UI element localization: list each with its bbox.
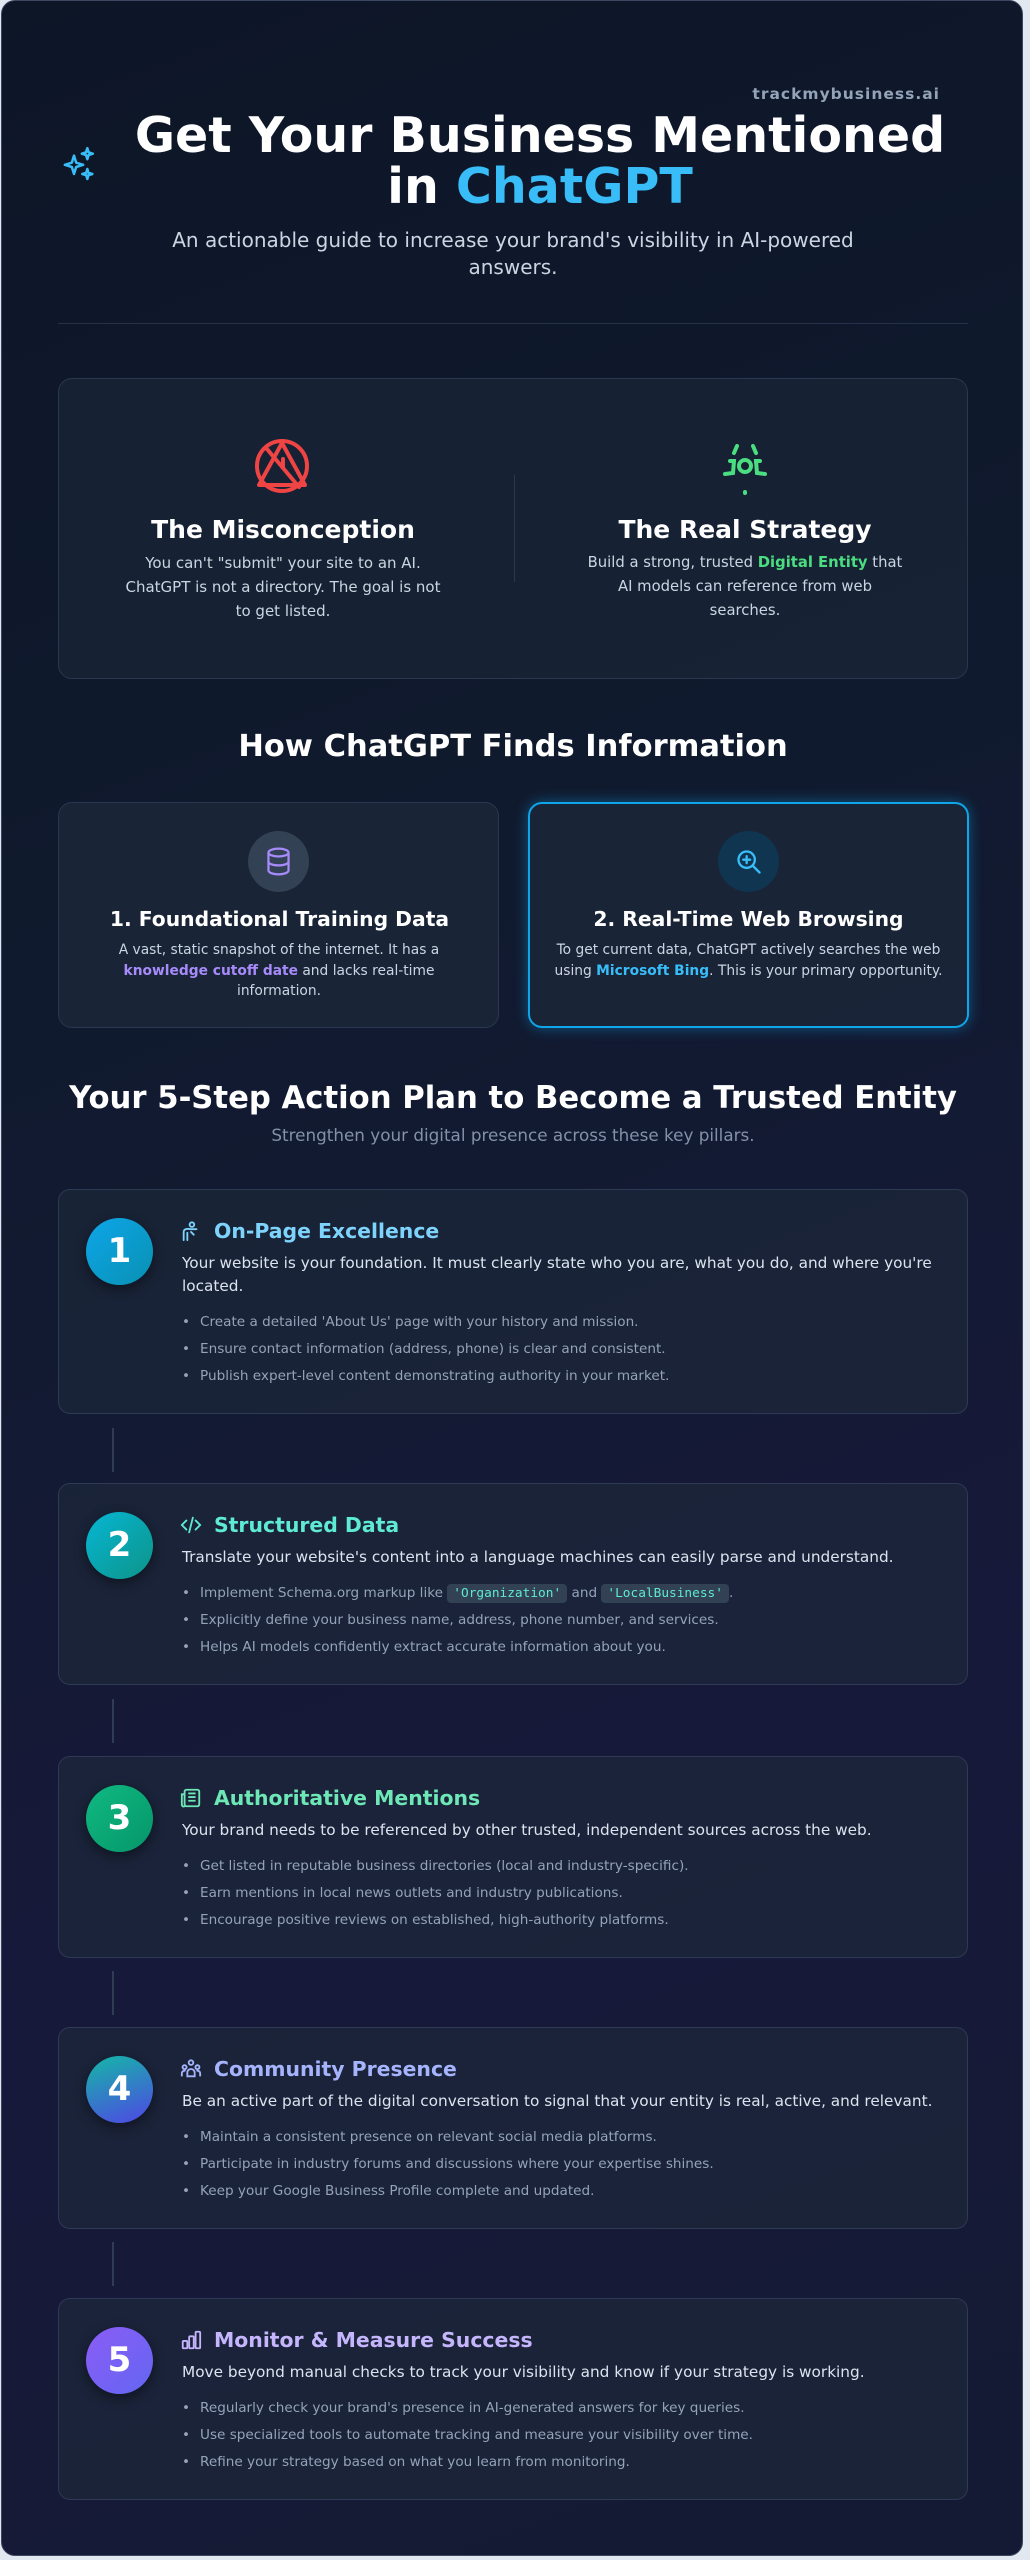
step desc 3: Your brand needs to be referenced by other trusted, independent sources across the web. [182, 1821, 872, 1839]
panel: training data [58, 802, 499, 1028]
step desc 4: Be an active part of the digital conversation to signal that your entity is real, active, and relevant. [182, 2092, 932, 2110]
text: real strategy [588, 554, 902, 619]
title: Get Your Business Mentioned [135, 107, 945, 164]
bullets 5: Refine your strategy based on what you learn from monitoring. [200, 2454, 630, 2470]
bullets 1 [184, 1314, 669, 1384]
bullets 3: Encourage positive reviews on established, high-authority platforms. [200, 1912, 669, 1928]
number badge 4: 4 [108, 2069, 131, 2109]
heading: misconception: The Misconception [151, 515, 415, 544]
number badge 5: 5 [108, 2340, 131, 2380]
number badge 3 [86, 1785, 153, 1852]
panel: web browsing [528, 802, 969, 1028]
panel: misconception vs strategy [58, 378, 968, 679]
brand tag: trackmybusiness.ai [752, 85, 940, 103]
bullets 5: Regularly check your brand's presence in AI-generated answers for key queries. [200, 2400, 745, 2416]
bullets 4: Participate in industry forums and discussions where your expertise shines. [200, 2156, 714, 2172]
title [135, 107, 945, 215]
bullets 3: Earn mentions in local news outlets and industry publications. [200, 1885, 623, 1901]
step title 5: Monitor & Measure Success [214, 2328, 533, 2352]
bullets 3: Get listed in reputable business directories (local and industry-specific). [200, 1858, 689, 1874]
number badge 5 [86, 2327, 153, 2394]
bullets 4: Keep your Google Business Profile complete and updated. [200, 2183, 594, 2199]
heading: 5-step action plan: Your 5-Step Action Plan to Become a Trusted Entity [69, 1081, 957, 1116]
bullets 2 [184, 1584, 733, 1655]
bullets 5 [184, 2400, 753, 2470]
step 2: structured data [58, 1483, 968, 1685]
icon: search [718, 831, 779, 892]
step desc 2: Translate your website's content into a language machines can easily parse and understand. [182, 1548, 894, 1566]
heading: training data: 1. Foundational Training Data [110, 907, 449, 931]
step 3: authoritative mentions [58, 1756, 968, 1958]
step desc 1: Your website is your foundation. It must clearly state who you are, what you do, and where you're located. [182, 1254, 932, 1295]
number badge 1 [86, 1218, 153, 1285]
number badge 2: 2 [108, 1525, 131, 1565]
bullets 2: Explicitly define your business name, address, phone number, and services. [200, 1612, 719, 1628]
text: web browsing: To get current data, ChatGPT actively searches the web using Microsoft Bing. This is your primary opportunity. [555, 942, 942, 979]
icon: green strategy [723, 444, 767, 495]
subheading: Strengthen your digital presence across these key pillars. [271, 1125, 755, 1145]
number badge 2 [86, 1512, 153, 1579]
step 5: monitor & measure [58, 2298, 968, 2500]
icon: red no-submission [255, 439, 309, 493]
icon: sparkles [64, 146, 94, 180]
bullets 1: Create a detailed 'About Us' page with your history and mission. [200, 1314, 639, 1330]
bullets 2: Helps AI models confidently extract accurate information about you. [200, 1639, 666, 1655]
bullets 1: Publish expert-level content demonstrating authority in your market. [200, 1368, 669, 1384]
step title 1: On-Page Excellence [214, 1219, 439, 1243]
bullets 2: Implement Schema.org markup like 'Organization' and 'LocalBusiness' . [200, 1585, 733, 1601]
bullets 3 [184, 1858, 689, 1928]
number badge 4 [86, 2056, 153, 2123]
step title 4: Community Presence [214, 2057, 457, 2081]
text: misconception: You can't "submit" your site to an AI. ChatGPT is not a directory. The goal is not to get listed. [125, 554, 440, 620]
bullets 4 [184, 2129, 714, 2199]
text: real strategy: searches. [710, 602, 780, 619]
number badge 3: 3 [108, 1798, 131, 1838]
subtitle: An actionable guide to increase your brand's visibility in AI-powered answers. [172, 228, 854, 279]
step title 2: Structured Data [214, 1513, 399, 1537]
heading: how chatgpt finds information: How ChatGPT Finds Information [238, 729, 788, 764]
heading: web browsing: 2. Real-Time Web Browsing [593, 907, 904, 931]
step desc 5: Move beyond manual checks to track your visibility and know if your strategy is working. [182, 2363, 865, 2381]
icon: database [248, 831, 309, 892]
bullets 4: Maintain a consistent presence on relevant social media platforms. [200, 2129, 657, 2145]
number badge 1: 1 [108, 1231, 131, 1271]
heading: real strategy: The Real Strategy [618, 515, 872, 544]
bullets 1: Ensure contact information (address, phone) is clear and consistent. [200, 1341, 666, 1357]
text: real strategy: Build a strong, trusted Digital Entity that AI models can reference from web [588, 554, 902, 595]
text: training data: A vast, static snapshot of the internet. It has a knowledge cutoff date and lacks real-time information. [119, 942, 439, 999]
bullets 5: Use specialized tools to automate tracking and measure your visibility over time. [200, 2427, 753, 2443]
step 4: community presence [58, 2027, 968, 2229]
title: in ChatGPT [387, 158, 693, 215]
step title 3: Authoritative Mentions [214, 1786, 480, 1810]
step 1: on-page excellence [58, 1189, 968, 1414]
